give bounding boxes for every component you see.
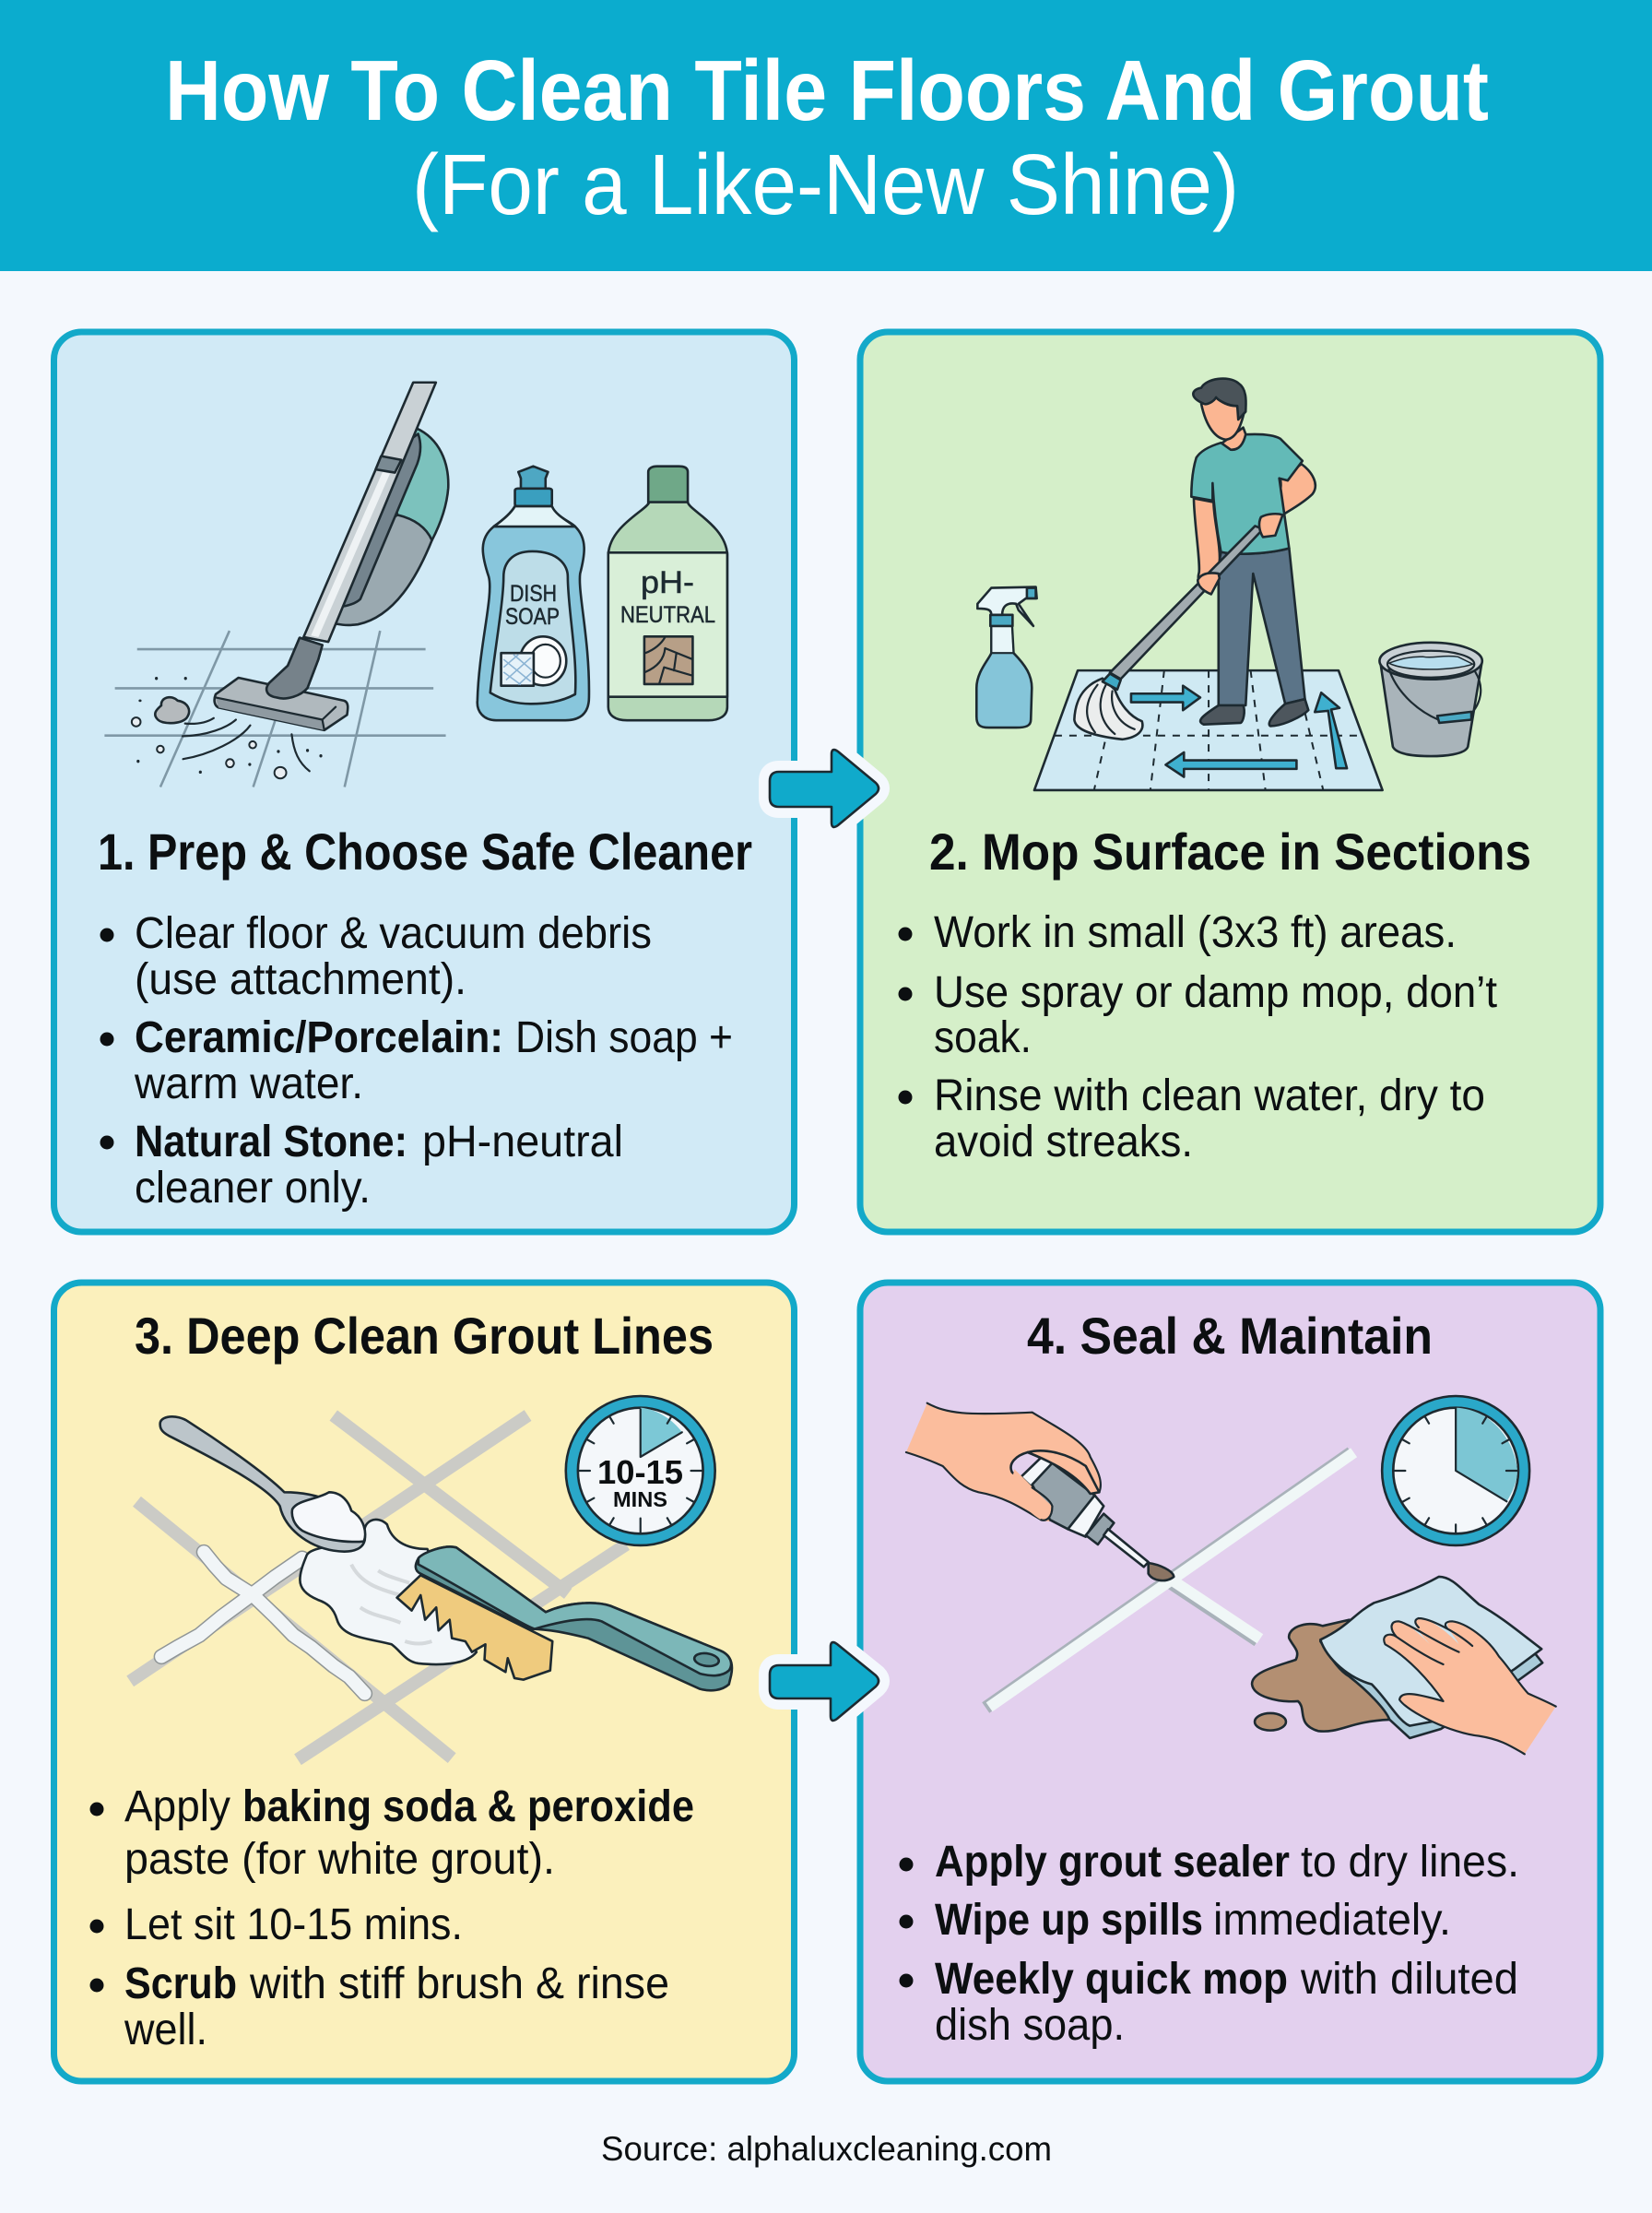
illustration: grout lines with paste, spoon and brush — [130, 1415, 732, 1759]
label: pH neutral: NEUTRAL — [620, 602, 715, 628]
heading: 3. Deep Clean Grout Lines — [135, 1307, 714, 1365]
bullet list: Use spray or damp mop, don’t — [934, 968, 1497, 1017]
bullet list: soak. — [934, 1013, 1032, 1062]
subtitle: (For a Like-New Shine) — [412, 136, 1239, 232]
illustration: man mopping tile section — [1034, 379, 1383, 790]
bullet list: cleaner only. — [135, 1164, 371, 1213]
bullet list — [900, 1838, 1519, 2050]
bullet list: with stiff brush & rinse — [249, 1959, 669, 2008]
bullet list: Wipe up spills — [935, 1896, 1203, 1945]
bullet list: Dish soap + — [515, 1013, 733, 1062]
heading: 2. Mop Surface in Sections — [929, 822, 1531, 881]
bullet list: Let sit 10-15 mins. — [124, 1900, 463, 1949]
illustration: hand wiping spill with cloth — [1252, 1577, 1556, 1754]
heading: 4. Seal & Maintain — [1027, 1307, 1433, 1365]
arrow: step 3 to step 4 — [770, 1642, 879, 1721]
bullet list: baking soda & peroxide — [242, 1782, 694, 1831]
icon: bucket — [1379, 643, 1482, 756]
title: How To Clean Tile Floors And Grout — [165, 42, 1489, 138]
bullet list: Apply grout sealer — [935, 1838, 1290, 1887]
icon: spray bottle — [976, 587, 1037, 728]
bullet list: Apply — [124, 1782, 230, 1831]
bullet list: pH-neutral — [422, 1118, 623, 1166]
label: pH neutral — [620, 565, 715, 628]
icon: dish soap bottle — [478, 467, 589, 720]
icon: clock — [1382, 1396, 1529, 1545]
bullet list — [90, 1782, 694, 2054]
panel: step 3 deep clean grout — [53, 1283, 795, 2081]
bullet list: (use attachment). — [135, 955, 466, 1004]
icon: pH neutral bottle — [608, 467, 727, 720]
illustration: hand applying grout sealer — [906, 1403, 1174, 1580]
bullet list: Ceramic/Porcelain: — [135, 1013, 503, 1062]
panel: step 2 mop surface — [860, 332, 1600, 1232]
label: dish soap: SOAP — [505, 604, 560, 630]
bullet list: Weekly quick mop — [935, 1955, 1288, 2004]
illustration: vacuum on tile floor — [104, 383, 448, 787]
bullet list: dish soap. — [935, 2001, 1125, 2050]
bullet list: well. — [124, 2006, 207, 2054]
timer label — [597, 1453, 683, 1511]
timer label: MINS — [613, 1487, 667, 1511]
panel: step 1 prep and choose cleaner — [53, 332, 795, 1232]
bullet list: Rinse with clean water, dry to — [934, 1071, 1485, 1120]
icon: timer 10-15 mins — [566, 1396, 715, 1545]
panel: step 4 seal and maintain — [860, 1283, 1600, 2081]
label: dish soap: DISH — [510, 581, 557, 607]
label: pH neutral: pH- — [641, 565, 694, 600]
header banner — [0, 0, 1652, 271]
bullet list: paste (for white grout). — [124, 1835, 555, 1884]
timer label: 10-15 — [597, 1453, 683, 1491]
bullet list: to dry lines. — [1301, 1838, 1519, 1887]
label: dish soap — [505, 581, 560, 630]
bullet list: Scrub — [124, 1959, 237, 2008]
bullet list: immediately. — [1213, 1896, 1451, 1945]
heading: 1. Prep & Choose Safe Cleaner — [98, 822, 752, 881]
bullet list: warm water. — [134, 1059, 363, 1108]
bullet list: Work in small (3x3 ft) areas. — [934, 908, 1457, 957]
bullet list: Natural Stone: — [135, 1118, 407, 1166]
source footer: Source: alphaluxcleaning.com — [601, 2130, 1052, 2168]
arrow: step 1 to step 2 — [770, 750, 879, 827]
bullet list — [898, 908, 1497, 1166]
bullet list — [100, 909, 733, 1213]
bullet list: with diluted — [1300, 1955, 1518, 2004]
illustration: grout cross line — [985, 1452, 1354, 1708]
bullet list: Clear floor & vacuum debris — [135, 909, 652, 958]
bullet list: avoid streaks. — [934, 1118, 1193, 1166]
